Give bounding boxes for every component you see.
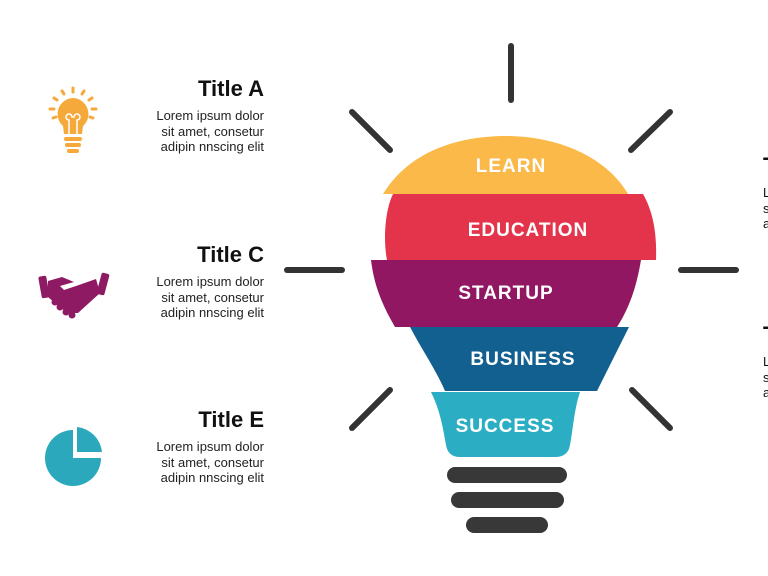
icon: pie chart [45,427,102,486]
bulb: learn: LEARN [476,156,546,177]
text block: Title E: sit amet, consetur [161,454,264,470]
text block: Title E: Lorem ipsum dolor [156,439,264,454]
text block: Title A [156,76,264,154]
bulb: education [385,194,656,260]
text block: Title C: adipin nnscing elit [161,305,264,320]
bulb: learn [383,136,628,194]
text block: Title E [156,407,264,485]
bulb: business [410,327,629,391]
text block: Title B [763,153,768,231]
icon: lightbulb [50,88,96,153]
text block: Title A: Lorem ipsum dolor [156,108,264,123]
bulb: startup [371,260,641,327]
bulb: business: BUSINESS [470,349,576,370]
text block: Title C: Title C [197,242,264,267]
text block: Title A: adipin nnscing elit [161,139,264,154]
text block: Title E: Title E [198,407,264,432]
text block: Title E: adipin nnscing elit [161,470,264,485]
bulb: success [431,392,580,457]
right text column (cropped) [763,153,768,400]
text block: Title C [156,242,264,320]
rays [287,46,736,428]
text block: Title C: Lorem ipsum dolor [156,274,264,289]
text block: Title A: Title A [198,76,264,101]
text block: Title C: sit amet, consetur [161,290,264,304]
bulb: success: SUCCESS [456,416,554,437]
bulb: education: EDUCATION [468,220,588,241]
icon: handshake [38,272,110,318]
bulb base [447,467,567,533]
bulb: startup: STARTUP [458,283,554,304]
text block: Title D [763,322,768,400]
text block: Title A: sit amet, consetur [161,124,264,138]
